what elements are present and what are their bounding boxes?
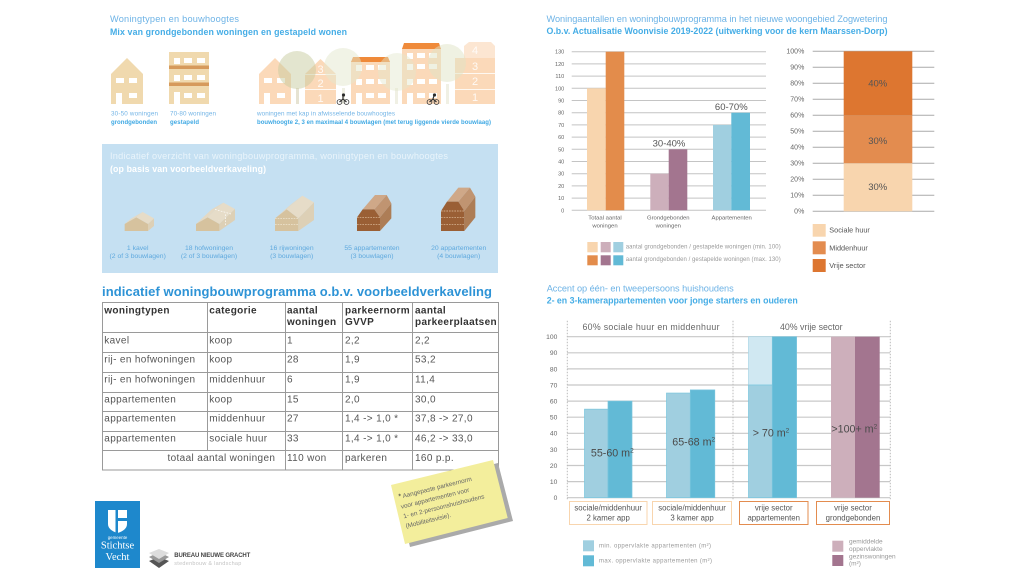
- table: woningbouwprogramma: 110 won: [287, 453, 327, 464]
- categorie labels: vrije sector: [755, 504, 793, 512]
- illustration: straatbeeld met afwisselende bouwhoogtes: 1: [472, 92, 478, 104]
- legend: oppervlakte gezinswoningen: [832, 539, 896, 568]
- bar chart: oppervlakte appartementen: 10: [550, 479, 558, 486]
- table: woningbouwprogramma: categorie: [209, 305, 257, 316]
- stacked bar chart: verdeling huur en koop: 70%: [790, 97, 804, 104]
- bar chart: oppervlakte appartementen: 2: [874, 423, 878, 430]
- bar chart: oppervlakte appartementen: 60: [550, 398, 558, 406]
- bar chart: woningaantallen: woningen: [655, 223, 681, 229]
- logo: Bureau Nieuwe Gracht: [149, 549, 251, 568]
- heading: accent op een- en tweepersoons huishoudens: Accent op één- en tweepersoons huishoudens: [547, 284, 734, 294]
- table: woningbouwprogramma: 6: [287, 375, 293, 386]
- heading: woningbouwprogramma tabel: indicatief woningbouwprogramma o.b.v. voorbeeldverkaveling: [102, 284, 492, 299]
- stacked bar chart: verdeling huur en koop: 40%: [790, 145, 804, 152]
- legend: sociale huur, middenhuur, vrije sector: Vrije sector: [829, 261, 866, 270]
- stacked bar chart: verdeling huur en koop: 80%: [790, 81, 804, 88]
- logo: Bureau Nieuwe Gracht: BUREAU NIEUWE GRACHT: [174, 553, 251, 559]
- bar chart: oppervlakte appartementen: 2: [711, 437, 715, 444]
- bar chart: oppervlakte appartementen: 60% sociale huur en middenhuur: [582, 322, 720, 332]
- table: woningbouwprogramma: sociale huur: [209, 433, 268, 444]
- categorie labels: [570, 502, 890, 524]
- bar chart: woningaantallen: Grondgebonden: [647, 216, 690, 222]
- heading: accent op een- en tweepersoons huishoudens: 2- en 3-kamerappartementen voor jonge starters en ouderen: [547, 295, 798, 305]
- bar chart: woningaantallen: 100: [555, 86, 564, 92]
- bouwblok labels: (3 bouwlagen): [350, 253, 394, 260]
- table: woningbouwprogramma: 11,4: [415, 375, 435, 386]
- heading: woningtypen en bouwhoogtes: [110, 14, 347, 37]
- stacked bar chart: verdeling huur en koop: 100%: [786, 49, 804, 56]
- table: woningbouwprogramma: woningtypen: [103, 305, 170, 316]
- table: woningbouwprogramma: 27: [287, 414, 299, 425]
- table: woningbouwprogramma: 28: [287, 355, 299, 366]
- legend: sociale huur, middenhuur, vrije sector: Sociale huur: [829, 225, 870, 234]
- table: woningbouwprogramma: 15: [287, 394, 299, 405]
- illustration: straatbeeld met afwisselende bouwhoogtes: 2: [472, 76, 478, 88]
- logo: Bureau Nieuwe Gracht: stedenbouw & landschap: [174, 561, 241, 567]
- stacked bar chart: verdeling huur en koop: 10%: [790, 193, 804, 200]
- categorie labels: grondgebonden: [826, 514, 880, 522]
- table: woningbouwprogramma: parkeernorm: [345, 305, 410, 316]
- bouwblok labels: 1 kavel: [127, 245, 149, 252]
- bouwblok labels: 55 appartementen: [344, 245, 400, 252]
- callout: aangepaste parkeernorm: [391, 460, 513, 547]
- legend: sociale huur, middenhuur, vrije sector: Middenhuur: [829, 244, 868, 253]
- table: woningbouwprogramma: 37,8 -> 27,0: [415, 414, 473, 425]
- bar chart: woningaantallen: 30-40%: [653, 139, 686, 150]
- bar chart: woningaantallen: 130: [555, 50, 564, 56]
- bouwblok labels: 16 rijwoningen: [270, 245, 314, 252]
- callout: aangepaste parkeernorm: (Mobiliteitsvisie).: [405, 512, 452, 530]
- bar chart: oppervlakte appartementen: 40% vrije sector: [780, 322, 843, 332]
- bar chart: woningaantallen: Appartementen: [712, 216, 752, 222]
- bar chart: oppervlakte appartementen: 65-68 m: [672, 437, 711, 449]
- table: woningbouwprogramma: woningen: [286, 317, 336, 328]
- bar chart: woningaantallen: 20: [558, 184, 564, 190]
- bar chart: oppervlakte appartementen: >100+ m: [831, 423, 874, 435]
- illustration: straatbeeld met afwisselende bouwhoogtes: 2: [317, 78, 324, 90]
- bar chart: woningaantallen: 70: [558, 123, 564, 129]
- bar chart: oppervlakte appartementen: 2: [630, 448, 634, 455]
- legend: oppervlakte gezinswoningen: (m²): [849, 561, 861, 568]
- heading: accent op een- en tweepersoons huishoudens: [547, 284, 798, 305]
- heading: woningtypen en bouwhoogtes: Mix van grondgebonden woningen en gestapeld wonen: [110, 27, 347, 37]
- table: woningbouwprogramma: 1,9: [345, 375, 360, 386]
- labels onder woningtypen: [111, 110, 491, 126]
- bar chart: woningaantallen: 10: [558, 196, 564, 202]
- table: woningbouwprogramma: parkeerplaatsen: [415, 317, 497, 328]
- table: woningbouwprogramma: 2,2: [345, 335, 360, 346]
- table: woningbouwprogramma: [102, 302, 498, 470]
- bar chart: woningaantallen: woningen: [591, 223, 618, 229]
- bouwblok labels: (3 bouwlagen): [270, 253, 313, 260]
- table: woningbouwprogramma: aantal: [287, 305, 318, 316]
- illustration: straatbeeld met afwisselende bouwhoogtes: [259, 42, 495, 105]
- table: woningbouwprogramma: rij- en hofwoningen: [104, 375, 195, 386]
- table: woningbouwprogramma: 1: [287, 335, 293, 346]
- table: woningbouwprogramma: koop: [209, 394, 232, 405]
- bar chart: woningaantallen: 60-70%: [715, 102, 748, 113]
- bar chart: oppervlakte appartementen: 100: [546, 334, 558, 341]
- stacked bar chart: verdeling huur en koop: [786, 49, 934, 216]
- legend: oppervlakte gezinswoningen: oppervlakte: [849, 546, 883, 553]
- table: woningbouwprogramma: koop: [209, 335, 232, 346]
- stacked bar chart: verdeling huur en koop: 60%: [790, 113, 804, 120]
- callout: aangepaste parkeernorm: 1- en 2-persoonshuishoudens: [403, 493, 485, 520]
- table: woningbouwprogramma: 160 p.p.: [415, 453, 454, 464]
- bar chart: oppervlakte appartementen: > 70 m: [753, 428, 786, 440]
- stacked bar chart: verdeling huur en koop: 90%: [790, 65, 804, 72]
- bar chart: woningaantallen: 90: [558, 98, 564, 104]
- stacked bar chart: verdeling huur en koop: 30%: [868, 182, 888, 193]
- table: woningbouwprogramma: middenhuur: [209, 375, 266, 386]
- heading: woningaantallen: O.b.v. Actualisatie Woonvisie 2019-2022 (uitwerking voor de kern Maarssen-Dorp): [546, 26, 888, 36]
- bar chart: oppervlakte appartementen: 30: [550, 447, 558, 454]
- legend: oppervlakte appartementen: [583, 540, 712, 566]
- legend: oppervlakte appartementen: max. oppervlakte appartementen (m²): [599, 558, 712, 564]
- legend: oppervlakte gezinswoningen: gezinswoningen: [849, 553, 896, 560]
- panel heading: [110, 151, 448, 174]
- bar chart: oppervlakte appartementen: 55-60 m: [591, 448, 630, 460]
- table: woningbouwprogramma: parkeren: [345, 453, 387, 464]
- bar chart: oppervlakte appartementen: 80: [550, 366, 558, 373]
- table: woningbouwprogramma: 2,0: [345, 394, 360, 405]
- icon: gestapeld woongebouw: [169, 52, 209, 104]
- bouwblok labels: (2 of 3 bouwlagen): [181, 253, 237, 260]
- table: woningbouwprogramma: 1,9: [345, 355, 360, 366]
- table: woningbouwprogramma: middenhuur: [209, 414, 266, 425]
- bar chart: woningaantallen: 60: [558, 135, 564, 141]
- heading: woningaantallen: [546, 14, 888, 36]
- table: woningbouwprogramma: 1,4 -> 1,0 *: [345, 414, 398, 425]
- table: woningbouwprogramma: aantal: [415, 305, 446, 316]
- table: woningbouwprogramma: GVVP: [345, 317, 374, 328]
- bar chart: woningaantallen: 0: [561, 208, 564, 214]
- stacked bar chart: verdeling huur en koop: 20%: [790, 177, 804, 184]
- table: woningbouwprogramma: 46,2 -> 33,0: [415, 433, 473, 444]
- icon: fietser rechts: [427, 94, 439, 104]
- bar chart: oppervlakte appartementen: 2: [786, 428, 790, 435]
- logo: gemeente Stichtse Vecht: gemeente: [108, 535, 128, 540]
- bar chart: oppervlakte appartementen: 20: [550, 463, 558, 470]
- bar chart: oppervlakte appartementen: 90: [550, 350, 558, 357]
- legend: sociale huur, middenhuur, vrije sector: [813, 224, 870, 272]
- bouwblok labels: 20 appartementen: [431, 245, 487, 252]
- bar chart: oppervlakte appartementen: 50: [550, 415, 558, 422]
- table: woningbouwprogramma: 30,0: [415, 394, 436, 405]
- illustration: straatbeeld met afwisselende bouwhoogtes: 3: [317, 64, 324, 76]
- categorie labels: vrije sector: [834, 504, 872, 512]
- labels onder woningtypen: woningen met kap in afwisselende bouwhoogtes: [256, 110, 395, 118]
- table: woningbouwprogramma: appartementen: [104, 414, 176, 425]
- table: woningbouwprogramma: appartementen: [104, 433, 176, 444]
- table: woningbouwprogramma: totaal aantal woningen: [168, 453, 275, 464]
- bar chart: woningaantallen: 30: [558, 172, 564, 178]
- stacked bar chart: verdeling huur en koop: 40%: [868, 79, 888, 90]
- legend: woningaantallen: [587, 242, 781, 265]
- labels onder woningtypen: bouwhoogte 2, 3 en maximaal 4 bouwlagen (met terug liggende vierde bouwlaag): [257, 120, 491, 126]
- bouwblok labels: 18 hofwoningen: [185, 245, 233, 252]
- logo: gemeente Stichtse Vecht: Vecht: [106, 552, 130, 563]
- icon: fietser links: [337, 94, 349, 104]
- table: woningbouwprogramma: appartementen: [104, 394, 176, 405]
- icon: grondgebonden woning: [111, 58, 143, 104]
- bar chart: woningaantallen: [555, 50, 766, 229]
- bouwblok labels: [110, 245, 487, 260]
- stacked bar chart: verdeling huur en koop: 30%: [868, 136, 888, 147]
- bar chart: oppervlakte appartementen: 70: [550, 382, 558, 389]
- categorie labels: sociale/middenhuur: [574, 504, 642, 512]
- labels onder woningtypen: 30-50 woningen: [111, 110, 158, 118]
- table: woningbouwprogramma: 53,2: [415, 355, 436, 366]
- labels onder woningtypen: gestapeld: [170, 120, 199, 126]
- logo: gemeente Stichtse Vecht: Stichtse: [101, 540, 134, 552]
- callout: aangepaste parkeernorm: voor appartementen voor: [400, 487, 470, 511]
- bar chart: woningaantallen: 50: [558, 147, 564, 153]
- bar chart: woningaantallen: 40: [558, 160, 564, 166]
- bar chart: woningaantallen: 80: [558, 111, 564, 117]
- categorie labels: 3 kamer app: [670, 514, 714, 522]
- labels onder woningtypen: grondgebonden: [111, 120, 157, 126]
- logo: gemeente Stichtse Vecht: [95, 501, 140, 568]
- table: woningbouwprogramma: 2,2: [415, 335, 430, 346]
- table: woningbouwprogramma: rij- en hofwoningen: [104, 355, 195, 366]
- labels onder woningtypen: 70-80 woningen: [170, 110, 216, 118]
- table: woningbouwprogramma: kavel: [104, 335, 129, 346]
- legend: oppervlakte appartementen: min. oppervlakte appartementen (m²): [599, 543, 711, 549]
- callout: aangepaste parkeernorm: * Aangepaste parkeernorm: [397, 474, 473, 501]
- table: woningbouwprogramma: 1,4 -> 1,0 *: [345, 433, 398, 444]
- categorie labels: appartementen: [747, 514, 800, 522]
- legend: woningaantallen: aantal grondgebonden / gestapelde woningen (min. 100): [626, 244, 781, 250]
- table: woningbouwprogramma: 33: [287, 433, 299, 444]
- categorie labels: sociale/middenhuur: [658, 504, 726, 512]
- bouwblok labels: (2 of 3 bouwlagen): [110, 253, 166, 260]
- illustration: straatbeeld met afwisselende bouwhoogtes: 3: [472, 61, 478, 73]
- bar chart: woningaantallen: Totaal aantal: [588, 216, 622, 222]
- bar chart: oppervlakte appartementen: 40: [550, 431, 558, 438]
- panel: indicatief overzicht: [102, 144, 498, 273]
- bouwblok labels: (4 bouwlagen): [437, 253, 480, 260]
- bar chart: woningaantallen: 120: [555, 62, 564, 68]
- bar chart: oppervlakte appartementen: [546, 321, 890, 502]
- panel heading: Indicatief overzicht van woningbouwprogramma, woningtypen en bouwhoogtes: [110, 151, 448, 161]
- illustration: straatbeeld met afwisselende bouwhoogtes: 1: [317, 93, 324, 105]
- stacked bar chart: verdeling huur en koop: 0%: [794, 209, 804, 216]
- panel heading: (op basis van voorbeeldverkaveling): [110, 164, 266, 174]
- heading: woningaantallen: Woningaantallen en woningbouwprogramma in het nieuwe woongebied Zogwetering: [546, 14, 888, 24]
- stacked bar chart: verdeling huur en koop: 50%: [790, 129, 804, 136]
- illustration: straatbeeld met afwisselende bouwhoogtes: 4: [472, 45, 478, 57]
- stacked bar chart: verdeling huur en koop: 30%: [790, 161, 804, 168]
- legend: woningaantallen: aantal grondgebonden / gestapelde woningen (max. 130): [626, 257, 781, 263]
- icon: bouwblokken: [125, 188, 475, 231]
- categorie labels: 2 kamer app: [587, 514, 631, 522]
- heading: woningtypen en bouwhoogtes: Woningtypen en bouwhoogtes: [110, 14, 239, 24]
- bar chart: oppervlakte appartementen: 0: [554, 495, 558, 502]
- table: woningbouwprogramma: koop: [209, 355, 232, 366]
- bar chart: woningaantallen: 110: [555, 74, 564, 80]
- legend: oppervlakte gezinswoningen: gemiddelde: [849, 539, 883, 546]
